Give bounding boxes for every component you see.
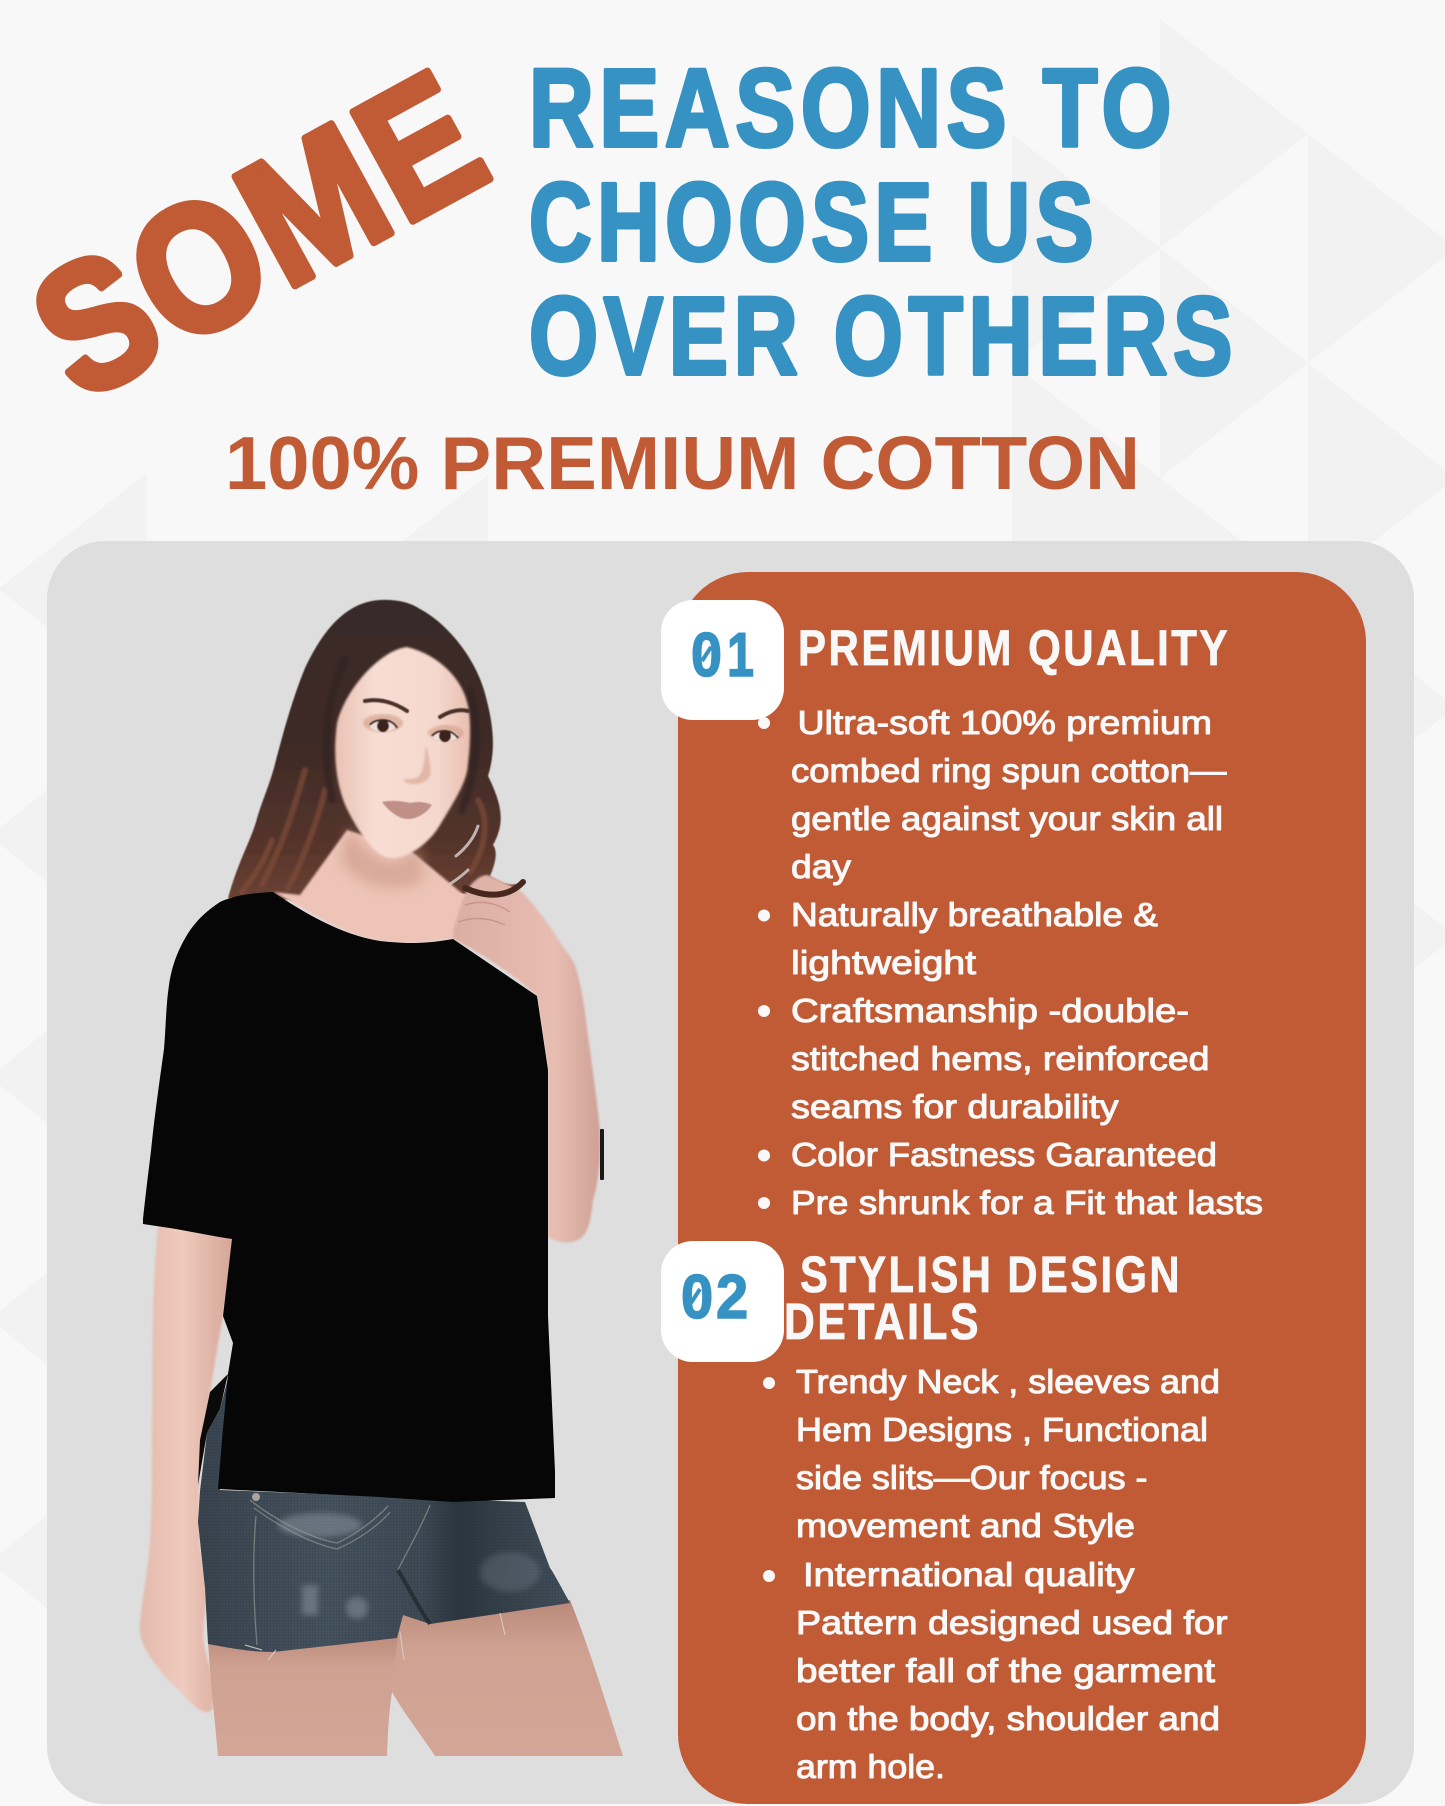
list 1 text: stitched hems, reinforced [791, 1041, 1210, 1078]
shirt sleeve snippet at elbow [600, 1129, 604, 1180]
badge 01 [661, 600, 784, 720]
list 1 text: Craftsmanship -double- [791, 993, 1189, 1030]
title: reasons to choose us over others: REASONS TO [529, 47, 1177, 170]
right arm and hand [453, 875, 600, 1242]
right thigh [392, 1600, 623, 1756]
dark hair strands near the face [326, 660, 476, 810]
left arm [140, 1225, 235, 1712]
lips [382, 801, 432, 819]
panel: orange content card [678, 572, 1366, 1804]
list 1 text: Color Fastness Garanteed [791, 1137, 1217, 1174]
list 1 text: Pre shrunk for a Fit that lasts [791, 1185, 1263, 1222]
hair gaps showing background [450, 826, 478, 884]
photo: woman in black t-shirt [140, 600, 623, 1756]
list 1 text: gentle against your skin all [791, 801, 1223, 838]
denim shorts [198, 1378, 570, 1652]
title: reasons to choose us over others [529, 47, 1238, 398]
list 1 text: Ultra-soft 100% premium [798, 705, 1212, 742]
denim details [250, 1500, 430, 1645]
heading: SOME rotated: SOME [2, 32, 517, 437]
list 2 text: arm hole. [796, 1749, 945, 1786]
list 2 text: movement and Style [796, 1508, 1135, 1545]
title: reasons to choose us over others: CHOOSE US [529, 161, 1099, 284]
heading 2 [784, 1246, 1182, 1350]
list 2 text: on the body, shoulder and [796, 1701, 1220, 1738]
heading 1: PREMIUM QUALITY [798, 620, 1230, 676]
heading 2: STYLISH DESIGN [800, 1246, 1182, 1303]
list 2 text: Hem Designs , Functional [796, 1412, 1208, 1449]
neck and chest [273, 830, 470, 943]
shirt back flap [198, 1374, 228, 1485]
neck shadow [340, 825, 424, 888]
list 2 text: Pattern designed used for [796, 1605, 1228, 1642]
face [335, 647, 470, 858]
bullet dots 1 [758, 717, 770, 1209]
list 1 text: seams for durability [791, 1089, 1119, 1126]
eyebrows [365, 700, 468, 717]
badge 02: 02 [681, 1263, 751, 1332]
list 2 text: Trendy Neck , sleeves and [796, 1364, 1220, 1401]
panel: gray card [47, 541, 1414, 1804]
bullet dots 2 [763, 1377, 775, 1582]
list 1 text [791, 705, 1263, 1222]
heading 2: DETAILS [784, 1293, 981, 1350]
hair curl over hand [465, 882, 523, 895]
hair highlights [242, 770, 485, 892]
hair [228, 600, 523, 900]
badge 01: 1 [727, 621, 754, 690]
list 1 text: lightweight [791, 945, 977, 982]
list 2 text: side slits—Our focus - [796, 1460, 1148, 1497]
denim frayed hem [245, 1613, 505, 1660]
eyes [370, 720, 458, 742]
list 2 text [796, 1364, 1228, 1786]
black t-shirt [143, 892, 555, 1502]
list 1 text: combed ring spun cotton— [791, 753, 1227, 790]
list 1 text: day [791, 849, 851, 886]
badge 01: 0 [691, 621, 722, 690]
finger lines [458, 902, 510, 925]
section 1: premium quality [661, 600, 1263, 1222]
eye shadows [363, 714, 403, 732]
title: reasons to choose us over others: OVER OTHERS [529, 275, 1238, 398]
left thigh [208, 1630, 403, 1756]
subtitle: 100% PREMIUM COTTON [225, 421, 1140, 505]
list 2 text: International quality [803, 1557, 1135, 1594]
nose [403, 745, 431, 784]
list 2 text: better fall of the garment [796, 1653, 1216, 1690]
list 1 text: Naturally breathable & [791, 897, 1158, 934]
denim weave [198, 1378, 570, 1652]
badge 02 [661, 1241, 784, 1362]
section 2: stylish design details [661, 1241, 1228, 1786]
